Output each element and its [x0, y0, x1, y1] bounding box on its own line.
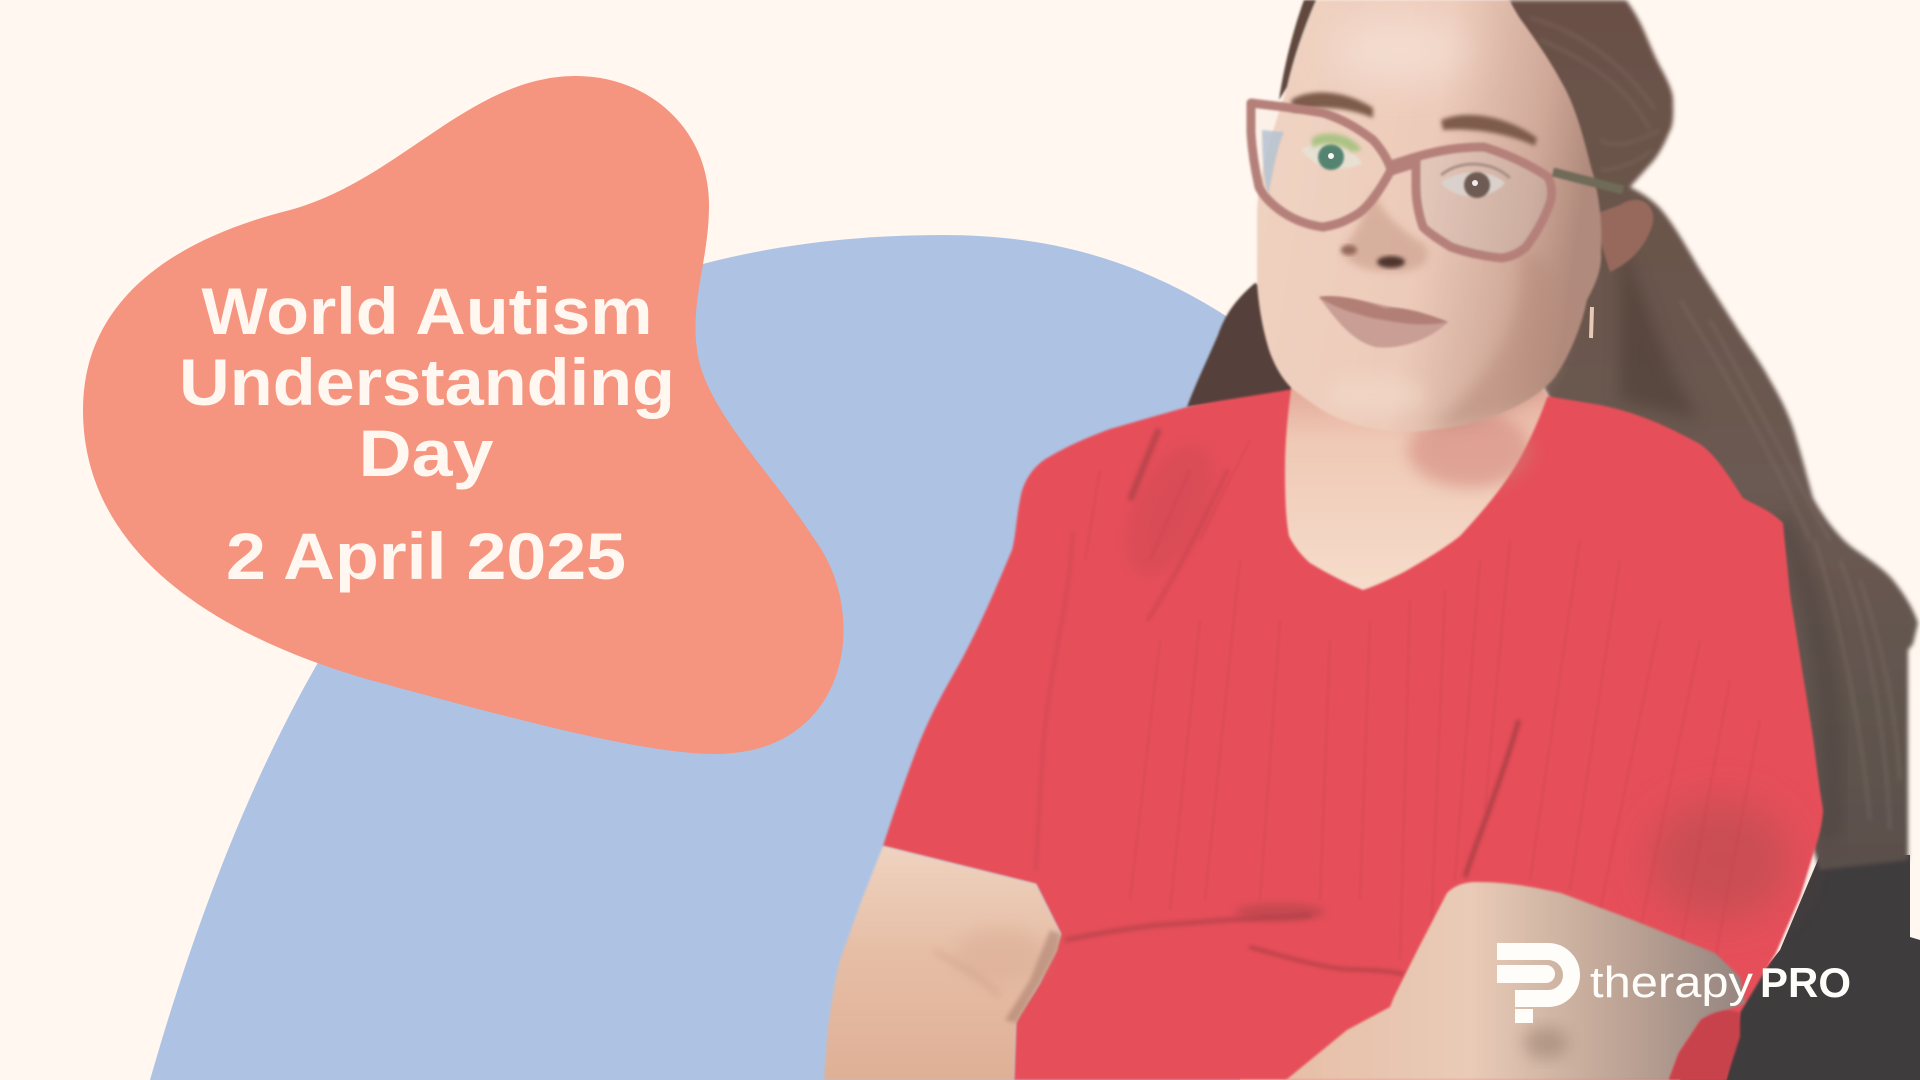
title: World Autism — [202, 274, 652, 348]
sleeve shading — [1650, 800, 1790, 920]
therapyPRO logo: PRO — [1760, 959, 1851, 1006]
date: 2 April 2025 — [226, 519, 626, 593]
under-chin shadow — [1408, 412, 1532, 488]
title — [179, 274, 675, 490]
long hair — [1187, 0, 1918, 870]
red top — [883, 389, 1823, 1080]
glasses — [1251, 103, 1623, 258]
person: woman in red top wearing glasses — [824, 0, 1920, 1080]
neck and chest — [1285, 340, 1548, 590]
left lens reflection — [1262, 130, 1284, 195]
title: Day — [358, 416, 494, 490]
earring — [1591, 307, 1592, 338]
red sleeve cuff lower — [1669, 1010, 1740, 1080]
mouth — [1319, 296, 1448, 348]
logo mark — [1497, 952, 1571, 1023]
right arm — [1286, 882, 1745, 1080]
chin highlight — [1325, 375, 1425, 415]
face — [1257, 0, 1601, 432]
shoulder fold and seams — [1036, 429, 1519, 974]
hairline at left of forehead — [1279, 0, 1316, 100]
eyebrows — [1291, 92, 1537, 146]
title: Understanding — [179, 345, 675, 419]
coral blob — [83, 76, 844, 754]
logo wordmark: therapy — [1590, 958, 1753, 1007]
forehead highlight — [1330, 15, 1470, 85]
therapyPRO logo — [1497, 952, 1851, 1023]
cheek and jaw shading — [1430, 250, 1568, 428]
blue arch shape — [150, 235, 1240, 1080]
ear — [1592, 200, 1653, 272]
left arm — [824, 846, 1061, 1080]
eyes — [1301, 134, 1510, 198]
wheelchair back — [1680, 855, 1920, 1080]
nose — [1341, 190, 1428, 272]
